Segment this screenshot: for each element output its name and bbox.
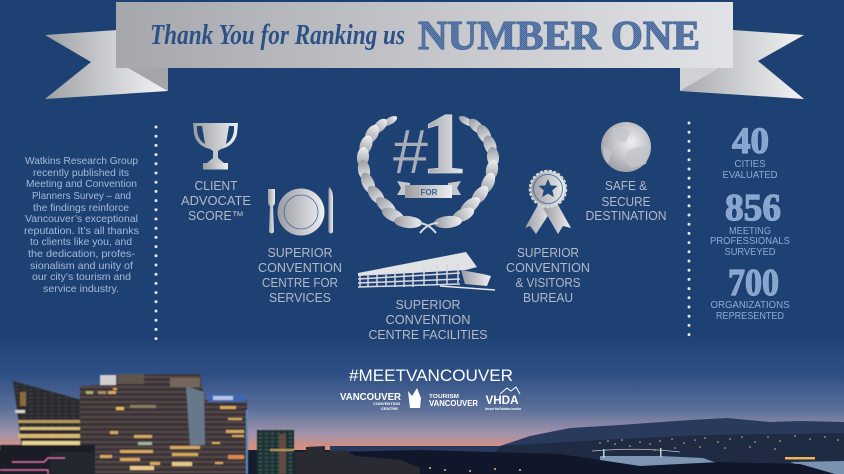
stat: 40 cities evaluated: 40 (732, 121, 769, 162)
intro text block: to clients like you, and (30, 237, 132, 248)
stat: 40 cities evaluated: CITIES (734, 158, 766, 170)
logo: VHDA (485, 387, 521, 411)
stat: 700 organizations represented: ORGANIZATIONS (710, 299, 790, 311)
label: superior convention and visitors bureau: SUPERIOR (517, 246, 579, 260)
teal tower (257, 430, 294, 474)
stat: 856 meeting professionals surveyed: MEETING (729, 225, 771, 237)
low building with pink lights (0, 445, 95, 474)
intro text block: service industry. (43, 284, 119, 295)
label: safe and secure destination: SAFE & (605, 179, 648, 193)
banner: right fold (680, 67, 733, 91)
intro text block: the findings reinforce (33, 203, 129, 214)
intro text block: Meeting and Convention (26, 179, 137, 190)
central tower (80, 374, 205, 474)
logo: VHDA: Vancouver Hotel Destination Association (485, 407, 521, 411)
right tower with sign (205, 394, 248, 474)
stat: 40 cities evaluated (722, 121, 778, 181)
banner: ribbon right tail (680, 30, 804, 99)
label: superior convention and visitors bureau: & VISITORS (516, 276, 580, 290)
right laurel (434, 114, 500, 229)
stat: 700 organizations represented (710, 262, 790, 322)
label: client advocate score: SCORE™ (188, 209, 244, 223)
logo: Vancouver Convention Centre: VANCOUVER (340, 391, 401, 403)
label: superior convention centre facilities: CONVENTION (386, 313, 470, 327)
label: superior convention centre facilities: CENTRE FACILITIES (368, 328, 488, 342)
hashtag: #MEETVANCOUVER (349, 366, 513, 385)
icon: trophy (193, 123, 238, 170)
intro text block: sionalism and unity of (30, 261, 133, 272)
logo: Vancouver Convention Centre (340, 391, 401, 411)
logo: Tourism Vancouver (408, 388, 478, 408)
intro text block: Vancouver’s exceptional (25, 214, 138, 225)
label: superior convention and visitors bureau: BUREAU (523, 291, 573, 305)
icon: convention centre building (358, 252, 495, 290)
title: thank you: Thank You for Ranking us (150, 20, 405, 51)
label: superior convention and visitors bureau: CONVENTION (506, 261, 590, 275)
intro text block: Planners Survey – and (32, 191, 131, 202)
stat: 856 meeting professionals surveyed: SURVEYED (724, 246, 776, 258)
stat: 700 organizations represented: 700 (728, 262, 779, 304)
left glass tower (13, 381, 82, 450)
intro text block: our city’s tourism and (32, 272, 131, 283)
label: superior convention centre facilities (368, 298, 488, 342)
label: client advocate score: CLIENT (194, 179, 238, 193)
label: superior convention centre for services: CENTRE FOR (262, 276, 338, 290)
logo: VHDA: VHDA (486, 393, 519, 407)
intro text block: Watkins Research Group (25, 156, 138, 167)
icon: globe (601, 122, 651, 172)
label: safe and secure destination (586, 179, 666, 223)
label: safe and secure destination: SECURE (602, 195, 650, 209)
stat: 856 meeting professionals surveyed: PROFESSIONALS (710, 235, 790, 247)
label: superior convention and visitors bureau (506, 246, 590, 305)
banner: ribbon left tail (45, 30, 168, 99)
buildings group (0, 374, 294, 474)
hash sign: # (393, 118, 429, 187)
intro text block: recently published its (33, 168, 129, 179)
for ribbon: FOR (421, 188, 438, 197)
logo: Tourism Vancouver: TOURISM (429, 394, 459, 400)
stat: 856 meeting professionals surveyed (710, 187, 790, 258)
label: superior convention centre for services: CONVENTION (258, 261, 342, 275)
label: superior convention centre facilities: SUPERIOR (396, 298, 460, 312)
logo: Vancouver Convention Centre: CONVENTION (373, 401, 400, 406)
dotted divider right (688, 123, 690, 336)
icon: award ribbon (525, 171, 571, 234)
photo: Vancouver skyline at dusk (0, 335, 844, 474)
logo: Vancouver Convention Centre: CENTRE (381, 406, 398, 411)
icon: laurel wreath with #1 (356, 96, 500, 233)
stat: 40 cities evaluated: EVALUATED (722, 169, 778, 181)
label: superior convention centre for services: SERVICES (269, 291, 331, 305)
dotted divider left (154, 127, 158, 339)
label: superior convention centre for services: SUPERIOR (268, 246, 332, 260)
numeral one: 1 (421, 96, 467, 193)
banner: main panel (116, 2, 733, 68)
stat: 700 organizations represented: REPRESENTED (716, 310, 784, 322)
for ribbon (397, 181, 461, 198)
title: number one: NUMBER ONE (418, 12, 700, 58)
label: superior convention centre for services (258, 246, 342, 305)
logo: Tourism Vancouver: VANCOUVER (429, 398, 478, 408)
intro text block: the dedication, profes- (28, 249, 135, 260)
banner: left fold (116, 67, 168, 91)
label: safe and secure destination: DESTINATION (586, 209, 666, 223)
intro text block (24, 156, 139, 295)
icon: plate and cutlery (268, 187, 333, 236)
label: client advocate score (181, 179, 251, 223)
label: client advocate score: ADVOCATE (181, 194, 251, 208)
left laurel (356, 114, 422, 229)
stat: 856 meeting professionals surveyed: 856 (725, 187, 781, 229)
intro text block: reputation. It’s all thanks (24, 226, 139, 237)
